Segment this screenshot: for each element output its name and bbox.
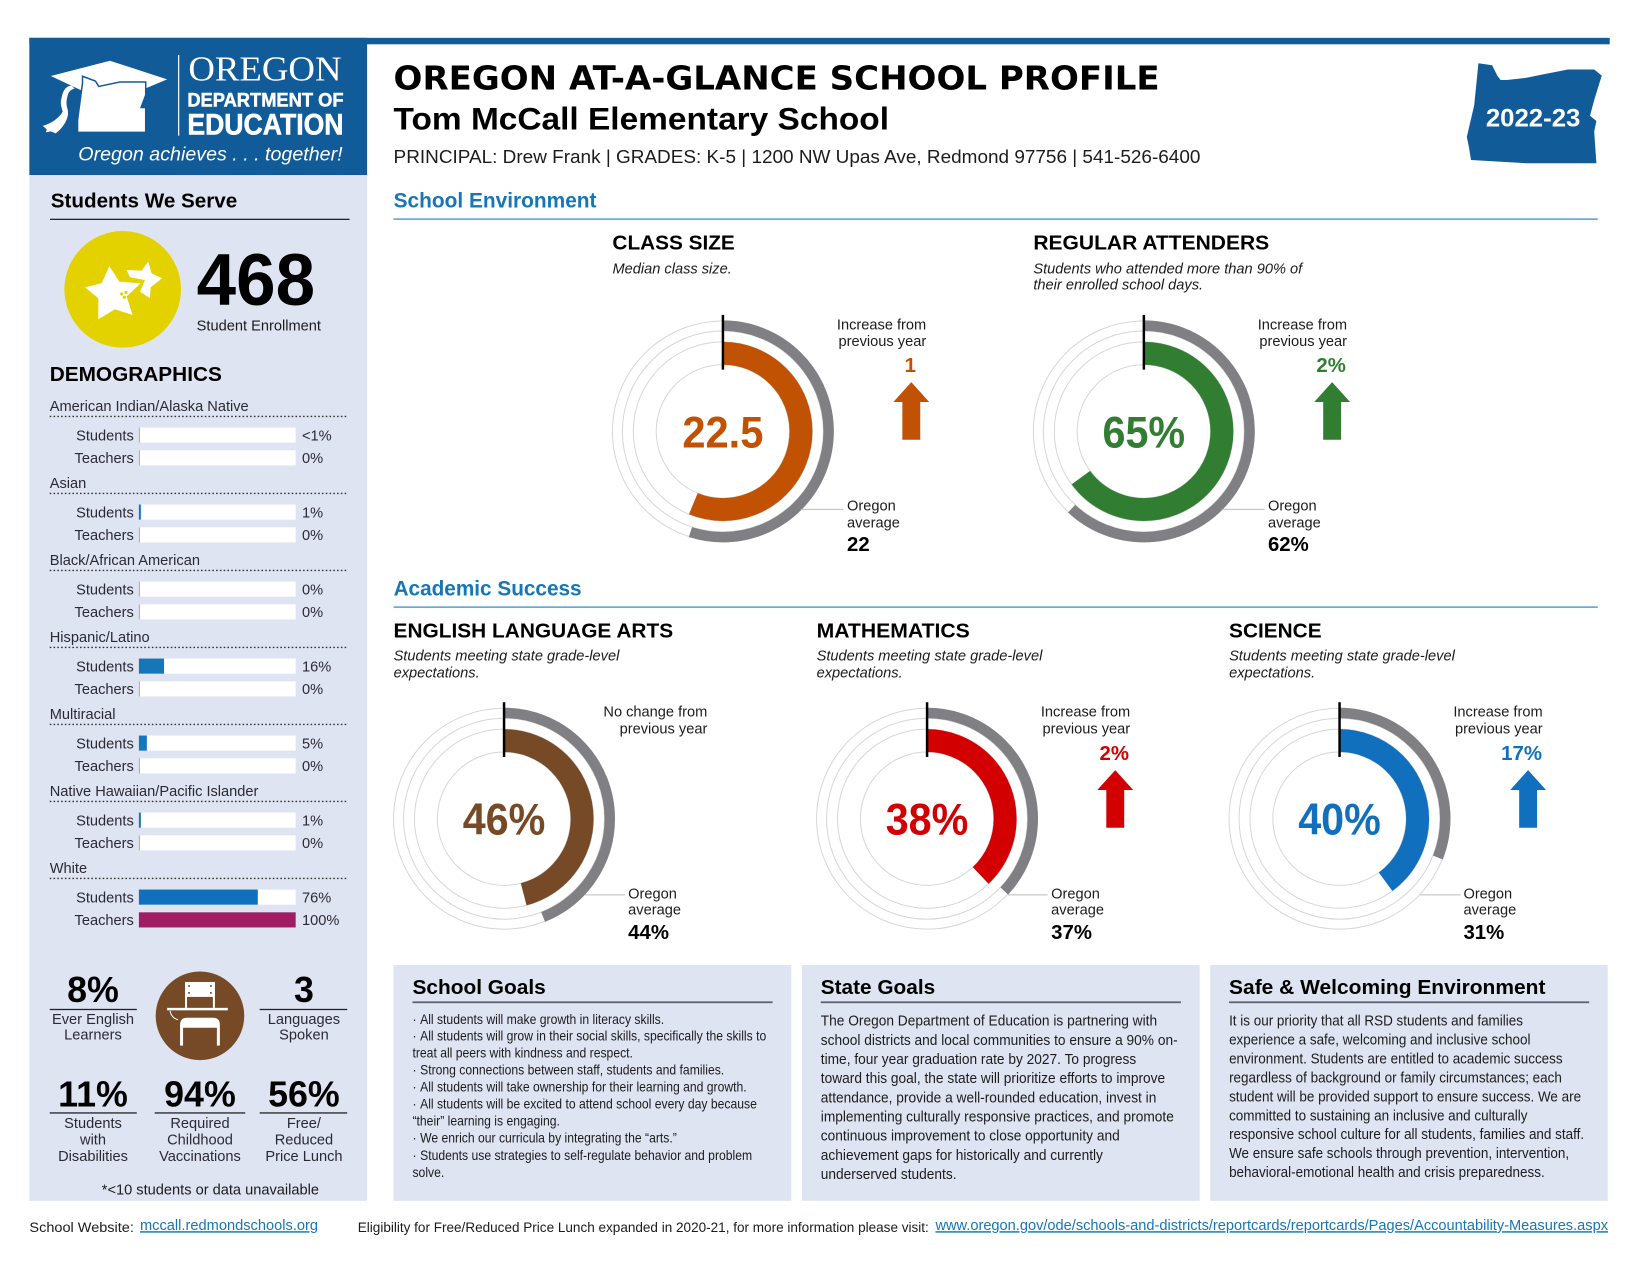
demographic group: Multiracial: Teachers bbox=[75, 759, 134, 775]
change from previous year: previous year bbox=[1259, 334, 1347, 350]
text block: state goals: The Oregon Department of Education is partnering with bbox=[821, 1013, 1157, 1030]
heading: regular attenders: REGULAR ATTENDERS bbox=[1033, 233, 1269, 255]
demographic group: White: Students bbox=[76, 890, 134, 906]
panel: Mathematics bbox=[817, 621, 1133, 944]
change from previous year: previous year bbox=[1042, 721, 1130, 737]
donut chart: 40% vs Oregon 31%: 40% bbox=[1298, 795, 1381, 845]
text block: school goals list: All students will take ownership for their learning and growth. bbox=[420, 1079, 747, 1095]
demographic group: Hispanic/Latino bbox=[50, 630, 347, 698]
panel: School Goals: School Goals bbox=[412, 977, 546, 999]
donut chart: 46% vs Oregon 44% bbox=[394, 702, 614, 929]
demographic group: White: 100% bbox=[302, 913, 339, 929]
demographic group: Black/African American: 0% bbox=[302, 582, 323, 598]
panel: Science: Students meeting state grade-level bbox=[1229, 649, 1456, 665]
heading: Academic Success: Academic Success bbox=[394, 577, 582, 600]
change from previous year: previous year bbox=[839, 334, 926, 350]
demographic group: Multiracial: Multiracial bbox=[50, 707, 116, 723]
Oregon average: average bbox=[1051, 902, 1104, 918]
change from previous year: 2% bbox=[1316, 355, 1346, 377]
stat: student enrollment: 468 bbox=[197, 238, 315, 321]
panel: regular attenders: their enrolled school days. bbox=[1033, 278, 1203, 294]
demographic group: Native Hawaiian/Pacific Islander: Native Hawaiian/Pacific Islander bbox=[50, 784, 259, 800]
demographic group: American Indian/Alaska Native: American Indian/Alaska Native bbox=[50, 399, 249, 415]
footnote: *<10 students or data unavailable bbox=[102, 1182, 319, 1198]
text block: school goals list: All students will make growth in literacy skills. bbox=[420, 1011, 664, 1027]
text block: school goals list bbox=[412, 1011, 766, 1180]
stat: Required Childhood Vaccinations: Vaccinations bbox=[159, 1149, 241, 1165]
demographic group: Native Hawaiian/Pacific Islander bbox=[50, 784, 347, 852]
demographic group: American Indian/Alaska Native: 0% bbox=[302, 451, 323, 467]
text block: safe and welcoming: It is our priority that all RSD students and families bbox=[1229, 1012, 1523, 1029]
demographic group: Hispanic/Latino: 0% bbox=[302, 682, 323, 698]
text block: safe and welcoming: student will be provided support to ensure success. We are bbox=[1229, 1088, 1581, 1104]
stat: Ever English Learners: Ever English bbox=[52, 1012, 134, 1028]
demographic group: American Indian/Alaska Native: Teachers bbox=[75, 451, 134, 467]
arrow up bbox=[893, 382, 929, 440]
panel: Safe & Welcoming Environment bbox=[1210, 965, 1608, 1201]
text block: safe and welcoming: responsive school culture for all students, families and staff. bbox=[1229, 1126, 1584, 1142]
demographic group: Native Hawaiian/Pacific Islander: 0% bbox=[302, 836, 323, 852]
demographic group: Black/African American: Black/African American bbox=[50, 553, 200, 569]
footer: school website: mccall.redmondschools.org bbox=[140, 1218, 318, 1234]
donut chart: class size 22.5 vs Oregon 22 bbox=[612, 315, 833, 542]
Oregon average: average bbox=[1463, 902, 1516, 918]
arrow up bbox=[1314, 382, 1350, 440]
demographic group: Asian: 0% bbox=[302, 528, 323, 544]
panel: class size: Median class size. bbox=[612, 262, 732, 278]
arrow up bbox=[1510, 770, 1546, 828]
demographic group: Hispanic/Latino: Students bbox=[76, 659, 134, 675]
demographic group: Multiracial bbox=[50, 707, 347, 775]
panel: class size bbox=[612, 233, 929, 556]
text block: state goals: toward this goal, the state will prioritize efforts to improve bbox=[821, 1071, 1165, 1087]
text block: safe and welcoming: environment. Students are entitled to academic success bbox=[1229, 1050, 1563, 1067]
change from previous year bbox=[837, 317, 929, 440]
stat: Ever English Learners bbox=[50, 970, 137, 1044]
demographic group: Black/African American bbox=[50, 553, 347, 621]
Oregon average: average bbox=[847, 515, 900, 531]
text block: school goals list: · bbox=[412, 1130, 417, 1146]
heading: School Environment: School Environment bbox=[394, 189, 597, 212]
text block: school goals list: · bbox=[412, 1011, 417, 1027]
header top bar bbox=[29, 38, 1610, 44]
change from previous year: Increase from bbox=[1041, 704, 1130, 720]
text block: safe and welcoming: behavioral-emotional health and crisis preparedness. bbox=[1229, 1164, 1545, 1180]
text block: state goals: achievement gaps for historically and currently bbox=[821, 1147, 1104, 1164]
demographic group: Multiracial: 0% bbox=[302, 759, 323, 775]
Oregon average: 22 bbox=[847, 534, 870, 556]
panel: English Language Arts bbox=[394, 621, 707, 944]
demographic group: Hispanic/Latino: Hispanic/Latino bbox=[50, 630, 150, 646]
no change from previous year bbox=[603, 704, 707, 737]
text block: school goals list: All students will be excited to attend school every day because bbox=[420, 1096, 757, 1112]
demographic group: Native Hawaiian/Pacific Islander: 1% bbox=[302, 813, 323, 829]
text block: state goals: underserved students. bbox=[821, 1166, 957, 1183]
badge: Oregon shape with year bbox=[1467, 63, 1602, 163]
change from previous year bbox=[1041, 704, 1133, 828]
stat: Required Childhood Vaccinations: Required bbox=[170, 1116, 230, 1132]
stat: Required Childhood Vaccinations: 94% bbox=[164, 1074, 236, 1114]
footer: free/reduced lunch note bbox=[358, 1218, 1609, 1235]
change from previous year: Increase from bbox=[1453, 704, 1543, 720]
panel: regular attenders: Students who attended more than 90% of bbox=[1033, 262, 1304, 278]
heading: Demographics: DEMOGRAPHICS bbox=[50, 364, 222, 386]
stat: Free/Reduced Price Lunch: 56% bbox=[268, 1074, 340, 1114]
Oregon average: Oregon bbox=[628, 886, 677, 902]
heading: ELA: ENGLISH LANGUAGE ARTS bbox=[394, 621, 673, 643]
panel: State Goals bbox=[802, 965, 1200, 1201]
logo: Oregon Department of Education bbox=[29, 38, 367, 175]
logo: Oregon Department of Education: DEPARTMENT OF bbox=[187, 90, 344, 112]
donut chart: 38% vs Oregon 37%: 38% bbox=[886, 795, 968, 845]
demographic group: Native Hawaiian/Pacific Islander: Students bbox=[76, 813, 134, 829]
Oregon average: Oregon bbox=[1268, 498, 1317, 514]
panel: sidebar background bbox=[29, 174, 367, 1201]
logo: Oregon Department of Education: OREGON bbox=[188, 50, 342, 89]
logo: Oregon Department of Education: EDUCATION bbox=[187, 108, 344, 141]
demographic group: Asian: Teachers bbox=[75, 528, 134, 544]
panel: School Goals bbox=[394, 965, 791, 1201]
icon: yellow circle with stars bbox=[64, 231, 181, 348]
heading: Mathematics: MATHEMATICS bbox=[817, 621, 970, 643]
logo: Oregon Department of Education: Oregon achieves . . . together! bbox=[78, 144, 343, 166]
panel: Mathematics: expectations. bbox=[817, 666, 903, 682]
heading: Students We Serve: Students We Serve bbox=[51, 190, 237, 212]
panel: Safe & Welcoming Environment: Safe & Welcoming Environment bbox=[1229, 977, 1546, 999]
text block: safe and welcoming bbox=[1229, 1012, 1584, 1180]
stat: Free/Reduced Price Lunch: Free/ bbox=[287, 1116, 322, 1132]
demographic group: Black/African American: Teachers bbox=[75, 605, 134, 621]
footer: free/reduced lunch note: Eligibility for Free/Reduced Price Lunch expanded in 2020-21, for more information please visit: bbox=[358, 1220, 929, 1235]
text block: safe and welcoming: experience a safe, welcoming and inclusive school bbox=[1229, 1031, 1530, 1048]
footer: school website bbox=[29, 1218, 318, 1235]
icon: graduation cap with Oregon shape bbox=[43, 61, 167, 133]
donut chart: 46% vs Oregon 44%: 46% bbox=[463, 795, 545, 845]
stat: Ever English Learners: Learners bbox=[64, 1028, 122, 1044]
demographic group: White: 76% bbox=[302, 890, 331, 906]
text block: school goals list: · bbox=[412, 1147, 417, 1163]
change from previous year: 1 bbox=[905, 355, 916, 377]
demographic group: Hispanic/Latino: Teachers bbox=[75, 682, 134, 698]
panel: Mathematics: Students meeting state grade-level bbox=[817, 649, 1043, 665]
Oregon average bbox=[1008, 886, 1104, 944]
text block: state goals: continuous improvement to close opportunity and bbox=[821, 1128, 1120, 1145]
stat: Languages Spoken: Languages bbox=[268, 1012, 340, 1028]
donut chart: class size 22.5 vs Oregon 22: 22.5 bbox=[682, 408, 763, 458]
demographic group: American Indian/Alaska Native: <1% bbox=[302, 428, 332, 444]
title: OREGON AT-A-GLANCE SCHOOL PROFILE bbox=[394, 60, 1160, 98]
panel: regular attenders bbox=[1033, 233, 1350, 556]
text block: state goals: attendance, provide a well-rounded education, invest in bbox=[821, 1090, 1156, 1107]
demographic group: Asian: Asian bbox=[50, 476, 86, 492]
text block: state goals: school districts and local communities to ensure a 90% on- bbox=[821, 1032, 1178, 1049]
no change from previous year: No change from bbox=[603, 704, 707, 720]
text block: state goals bbox=[821, 1013, 1178, 1183]
demographic group: Hispanic/Latino: 16% bbox=[302, 659, 331, 675]
panel: English Language Arts: Students meeting state grade-level bbox=[394, 649, 620, 665]
text block: school goals list: Strong connections between staff, students and families. bbox=[420, 1062, 724, 1078]
stat: Students with Disabilities: Disabilities bbox=[58, 1149, 128, 1165]
text block: school goals list: Students use strategies to self-regulate behavior and problem bbox=[420, 1147, 752, 1163]
panel: State Goals: State Goals bbox=[821, 977, 935, 999]
change from previous year: Increase from bbox=[1258, 317, 1347, 333]
Oregon average bbox=[1420, 886, 1516, 944]
donut chart: 38% vs Oregon 37% bbox=[817, 702, 1037, 929]
stat: Free/Reduced Price Lunch: Price Lunch bbox=[265, 1149, 343, 1165]
text block: school goals list: We enrich our curricula by integrating the “arts.” bbox=[420, 1130, 677, 1146]
panel: Science bbox=[1229, 621, 1546, 944]
stat: Languages Spoken: Spoken bbox=[279, 1028, 329, 1044]
demographic group: American Indian/Alaska Native bbox=[50, 399, 347, 467]
stat: student enrollment: Student Enrollment bbox=[197, 318, 321, 334]
demographic group: Asian: Students bbox=[76, 505, 134, 521]
stat: Students with Disabilities bbox=[50, 1074, 137, 1165]
demographic group: White: Teachers bbox=[75, 913, 134, 929]
demographic group: Multiracial: 5% bbox=[302, 736, 323, 752]
Oregon average bbox=[585, 886, 681, 944]
Oregon average: average bbox=[1268, 515, 1321, 531]
stat: Languages Spoken bbox=[260, 970, 347, 1044]
Oregon average bbox=[1222, 498, 1321, 556]
donut chart: 65% vs Oregon 62% bbox=[1033, 315, 1254, 542]
demographic group: Asian bbox=[50, 476, 347, 544]
demographic group: Black/African American: Students bbox=[76, 582, 134, 598]
Oregon average: Oregon bbox=[1463, 886, 1512, 902]
text block: safe and welcoming: regardless of background or family circumstances; each bbox=[1229, 1069, 1562, 1086]
Oregon average: average bbox=[628, 902, 681, 918]
badge: Oregon shape with year: 2022-23 bbox=[1486, 104, 1580, 132]
footer: free/reduced lunch note: www.oregon.gov/ode/schools-and-districts/reportcards/reportcards/Pages/Accountability-Measures.aspx bbox=[934, 1218, 1609, 1234]
icon: school chair in brown circle bbox=[156, 972, 244, 1060]
Oregon average: Oregon bbox=[1051, 886, 1100, 902]
heading: Science: SCIENCE bbox=[1229, 621, 1322, 643]
stat: Students with Disabilities: Students bbox=[64, 1116, 122, 1132]
donut chart: 40% vs Oregon 31% bbox=[1229, 702, 1450, 929]
text block: school goals list: treat all peers with kindness and respect. bbox=[412, 1045, 633, 1061]
Oregon average: 31% bbox=[1463, 922, 1504, 944]
change from previous year: previous year bbox=[1455, 721, 1543, 737]
text block: school goals list: · bbox=[412, 1079, 417, 1095]
demographic group: Multiracial: Students bbox=[76, 736, 134, 752]
no change from previous year: previous year bbox=[620, 721, 707, 737]
Oregon average: 62% bbox=[1268, 534, 1309, 556]
text block: school goals list: All students will grow in their social skills, specifically the skills to bbox=[420, 1028, 766, 1044]
text block: safe and welcoming: committed to sustaining an inclusive and culturally bbox=[1229, 1107, 1528, 1123]
change from previous year: 2% bbox=[1100, 743, 1129, 765]
heading: class size: CLASS SIZE bbox=[612, 233, 735, 255]
text block: state goals: implementing culturally responsive practices, and promote bbox=[821, 1109, 1174, 1126]
arrow up bbox=[1097, 770, 1133, 828]
text block: school goals list: “their” learning is engaging. bbox=[412, 1113, 560, 1129]
school name: Tom McCall Elementary School bbox=[394, 100, 889, 136]
stat: Free/Reduced Price Lunch bbox=[260, 1074, 347, 1165]
demographic group: American Indian/Alaska Native: Students bbox=[76, 428, 134, 444]
donut chart: 65% vs Oregon 62%: 65% bbox=[1103, 408, 1185, 458]
text block: state goals: time, four year graduation rate by 2027. To progress bbox=[821, 1052, 1136, 1068]
demographic group: White: White bbox=[50, 861, 87, 877]
change from previous year bbox=[1453, 704, 1546, 828]
stat: Free/Reduced Price Lunch: Reduced bbox=[275, 1133, 333, 1149]
text block: school goals list: · bbox=[412, 1028, 417, 1044]
demographic group: White bbox=[50, 861, 347, 929]
text block: school goals list: solve. bbox=[412, 1164, 444, 1180]
stat: Languages Spoken: 3 bbox=[294, 970, 314, 1010]
Oregon average: 37% bbox=[1051, 922, 1092, 944]
text block: school goals list: · bbox=[412, 1062, 417, 1078]
demographic group: Black/African American: 0% bbox=[302, 605, 323, 621]
change from previous year bbox=[1258, 317, 1350, 440]
stat: Required Childhood Vaccinations bbox=[155, 1074, 245, 1165]
text block: school goals list: · bbox=[412, 1096, 417, 1112]
Oregon average: Oregon bbox=[847, 498, 896, 514]
change from previous year: 17% bbox=[1501, 743, 1542, 765]
stat: Required Childhood Vaccinations: Childhood bbox=[167, 1133, 233, 1149]
Oregon average bbox=[801, 498, 900, 556]
panel: Science: expectations. bbox=[1229, 666, 1315, 682]
change from previous year: Increase from bbox=[837, 317, 926, 333]
footer: school website: School Website: bbox=[29, 1220, 134, 1235]
demographic group: Native Hawaiian/Pacific Islander: Teachers bbox=[75, 836, 134, 852]
stat: Ever English Learners: 8% bbox=[67, 970, 119, 1010]
stat: Students with Disabilities: 11% bbox=[58, 1074, 128, 1114]
demographic group: Asian: 1% bbox=[302, 505, 323, 521]
Oregon average: 44% bbox=[628, 922, 669, 944]
school info line: PRINCIPAL: Drew Frank | GRADES: K-5 | 1200 NW Upas Ave, Redmond 97756 | 541-526-6400 bbox=[394, 146, 1200, 167]
stat: Students with Disabilities: with bbox=[79, 1133, 106, 1149]
panel: English Language Arts: expectations. bbox=[394, 666, 480, 682]
text block: safe and welcoming: We ensure safe schools through prevention, intervention, bbox=[1229, 1145, 1569, 1161]
